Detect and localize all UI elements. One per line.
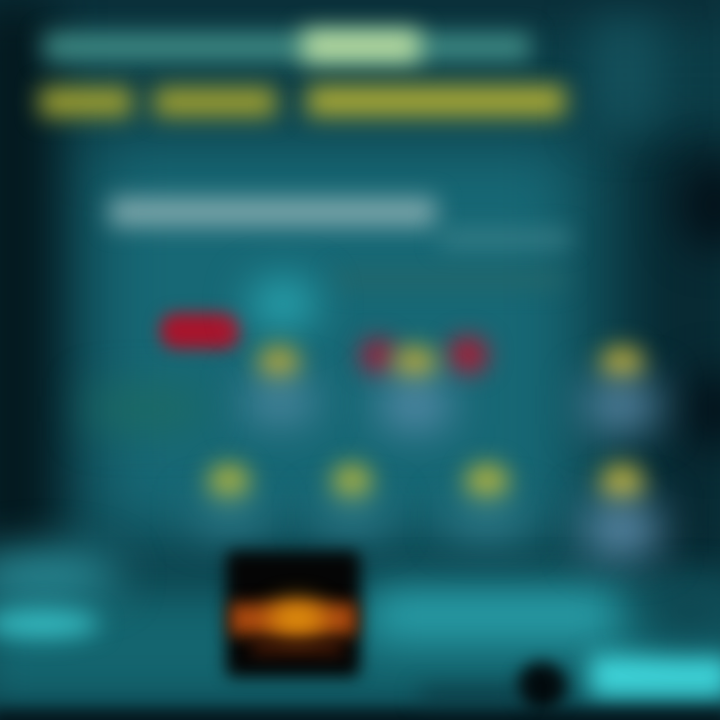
background: central teal glow [90,140,580,540]
card row one column two [364,330,466,450]
title block [24,11,582,134]
bottom edge [0,710,720,720]
background: right dark column [640,130,720,570]
faint label left [90,392,200,426]
yellow icon [208,464,250,500]
sub text line two [335,272,565,286]
jar glow centre [268,601,326,635]
card body [451,506,523,532]
desk object right [640,590,720,635]
jar glow [230,603,356,635]
yellow icon [600,346,644,380]
card body [248,384,312,418]
card body [320,504,384,528]
jar body [226,551,360,677]
card body [383,384,447,426]
dark cable on desk [420,690,520,702]
title line one highlight [302,30,420,62]
yellow icon [600,464,644,502]
card row two column two [314,449,390,548]
desk object left [0,550,120,600]
desk highlight bottom right [590,655,720,697]
red marker pair [149,301,250,361]
desk surface [0,590,720,705]
small dark disc on desk [517,662,567,710]
title line one [44,34,530,60]
title line two middle word [154,88,276,116]
title line two right word [307,86,565,116]
jar lower band [252,643,342,653]
background: left dark column [0,0,55,560]
title line two left word [40,88,132,116]
yellow icon [332,464,372,500]
background: top dark band [0,0,720,20]
subheading [110,198,436,226]
card row two column three [443,448,531,554]
red marker body [160,313,240,349]
desk highlight centre right [370,590,620,640]
yellow icon [258,346,300,380]
card row two column one [192,448,268,549]
card row one column one [232,330,328,440]
yellow icon [393,346,437,380]
desk highlight left [0,610,100,638]
red marker centre left [360,338,396,374]
card body [588,384,656,426]
sub text line one [440,232,570,246]
card body [588,504,656,554]
dark blob right upper [680,160,720,250]
cyan marker [250,282,316,326]
jar [214,540,373,688]
card row two column four [564,448,684,580]
yellow icon [465,464,509,500]
background: upper right building [590,20,660,130]
red marker centre right [448,336,488,374]
dark blob right lower [685,370,720,450]
card body [198,504,262,528]
card row one column three [568,330,684,454]
